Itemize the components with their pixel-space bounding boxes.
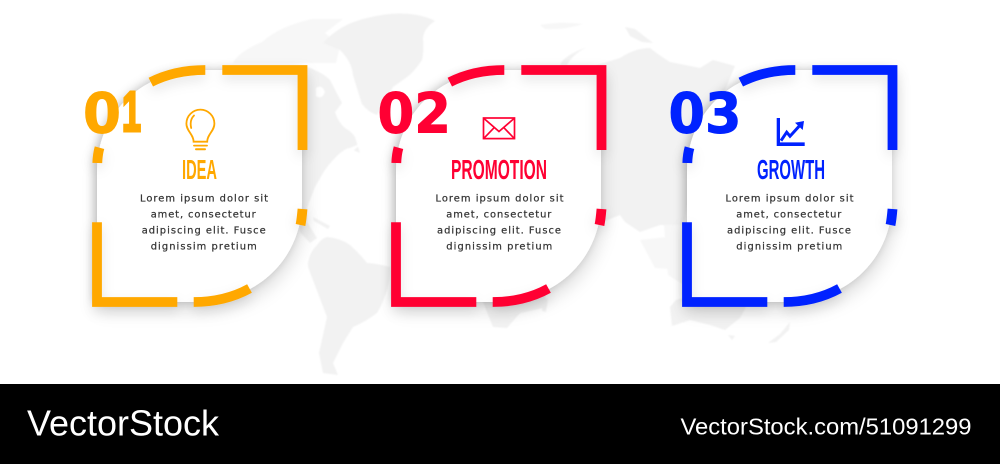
description: adipiscing elit. Fusce [142, 226, 266, 237]
dashed frame [396, 70, 602, 302]
description: Lorem ipsum dolor sit [726, 194, 854, 205]
card [396, 70, 601, 302]
icon: light bulb [186, 110, 214, 149]
dashed frame [687, 70, 892, 302]
world map [233, 14, 790, 375]
dashed frame [97, 70, 302, 302]
description: amet, consectetur [736, 210, 842, 221]
description: amet, consectetur [446, 210, 552, 221]
description: amet, consectetur [151, 210, 257, 221]
description: adipiscing elit. Fusce [727, 226, 851, 237]
description: dignissim pretium [446, 242, 552, 253]
panel: promotion [378, 70, 602, 302]
icon: envelope [484, 118, 514, 139]
description: dignissim pretium [736, 242, 842, 253]
number: 0 [83, 82, 121, 146]
description [726, 194, 854, 253]
number [83, 80, 141, 146]
number: 1 [122, 80, 141, 144]
heading: PROMOTION [451, 154, 547, 185]
card [97, 70, 302, 302]
description: dignissim pretium [151, 242, 257, 253]
icon: growth chart [777, 118, 805, 146]
description [436, 194, 564, 253]
description [140, 194, 268, 253]
description: Lorem ipsum dolor sit [436, 194, 564, 205]
footer url: VectorStock.com/51091299 [680, 414, 972, 440]
footer bar [0, 384, 1000, 464]
number: 03 [668, 82, 742, 146]
description: adipiscing elit. Fusce [437, 226, 561, 237]
heading: GROWTH [757, 154, 825, 185]
number: 02 [378, 82, 451, 146]
description: Lorem ipsum dolor sit [140, 194, 268, 205]
panel: growth [668, 70, 892, 302]
heading: IDEA [182, 154, 217, 185]
card [687, 70, 892, 302]
footer logo: VectorStock [27, 403, 220, 444]
panel: idea [83, 70, 302, 302]
